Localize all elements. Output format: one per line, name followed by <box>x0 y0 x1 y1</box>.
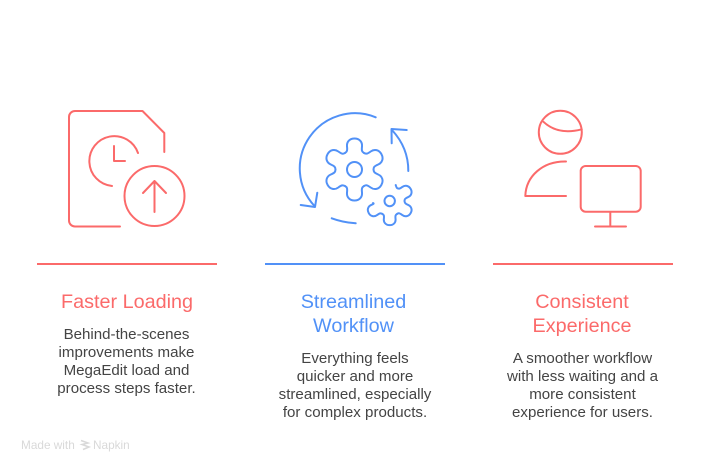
text: streamlined workflow description: quicker and more <box>297 368 413 385</box>
text: consistent experience description: more consistent <box>529 386 636 403</box>
text: consistent experience description: experience for users. <box>512 404 653 421</box>
watermark: made with napkin <box>21 438 130 452</box>
watermark: made with napkin: Napkin <box>93 438 130 452</box>
divider: streamlined workflow <box>265 263 445 265</box>
icon: document with clock and upload arrow <box>68 110 186 228</box>
text: consistent experience description: A smoother workflow <box>513 350 652 367</box>
heading: consistent experience <box>533 291 631 337</box>
heading: streamlined workflow: Streamlined <box>301 291 406 313</box>
heading: consistent experience: Experience <box>533 315 631 337</box>
text: faster loading description: process steps faster. <box>57 380 196 397</box>
text: streamlined workflow description: for complex products. <box>283 404 427 421</box>
watermark: made with napkin: Made with <box>21 438 75 452</box>
text: faster loading description: Behind-the-scenes <box>64 326 189 343</box>
icon: gears with circular arrows <box>298 112 413 226</box>
text: faster loading description: improvements make <box>59 344 194 361</box>
heading: faster loading: Faster Loading <box>61 291 193 313</box>
text: consistent experience description: with less waiting and a <box>507 368 658 385</box>
icon: person at a monitor <box>524 110 642 228</box>
text: streamlined workflow description <box>279 350 432 421</box>
text: faster loading description <box>57 326 196 397</box>
heading: consistent experience: Consistent <box>535 291 629 313</box>
text: faster loading description: MegaEdit load and <box>64 362 189 379</box>
text: consistent experience description <box>507 350 658 421</box>
heading: streamlined workflow: Workflow <box>313 315 394 337</box>
text: streamlined workflow description: streamlined, especially <box>279 386 431 403</box>
divider: consistent experience <box>493 263 673 265</box>
text: streamlined workflow description: Everything feels <box>301 350 409 367</box>
heading: streamlined workflow <box>301 291 406 337</box>
divider: faster loading <box>37 263 217 265</box>
